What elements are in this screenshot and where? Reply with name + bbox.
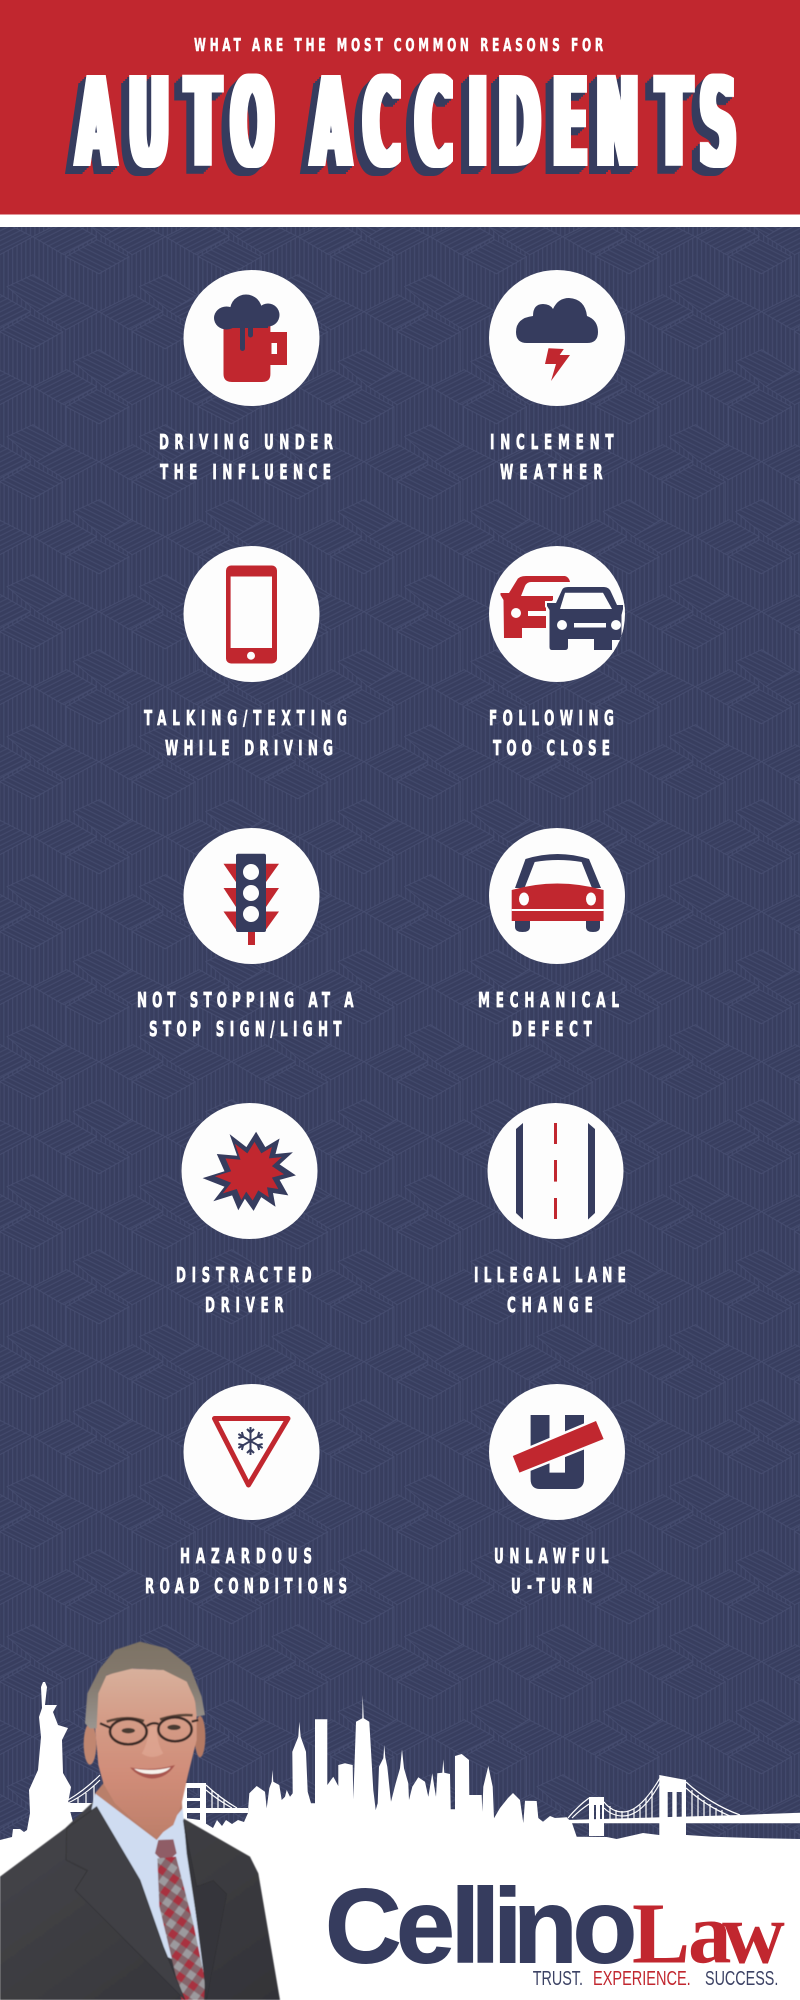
icon: car front [489,828,625,964]
logo: Cellino Law [325,1868,785,1990]
label: MECHANICAL [478,989,619,1012]
label: DRIVING UNDER [159,431,333,454]
logo wordmark: Cellino [325,1868,637,1986]
icon: traffic light [184,828,320,964]
item: hazardous road conditions [145,1384,347,1598]
item: following too close [489,546,625,760]
label: INCLEMENT [490,431,614,454]
label: ILLEGAL LANE [474,1264,626,1287]
right bridge deck, towers and cables [566,1775,800,1836]
title: AUTO ACCIDENTS [77,52,736,196]
icon: no u-turn [489,1384,625,1520]
left bridge deck and towers [68,1775,248,1828]
tagline [533,1968,778,1990]
label [144,707,347,760]
header band [0,0,800,214]
label: FOLLOWING [489,707,614,730]
item: talking/texting while driving [144,546,347,760]
patterned navy background [0,227,800,1400]
icon: beer mug [184,270,320,406]
item: inclement weather [489,270,625,484]
city skyline silhouette [0,1682,800,2000]
icon: explosion [182,1103,318,1239]
item: illegal lane change [474,1103,626,1317]
label: HAZARDOUS [180,1545,312,1568]
label [159,431,333,484]
label [494,1545,609,1598]
icon: storm cloud [489,270,625,406]
tagline: TRUST. [533,1968,583,1990]
icon: yield sign with snowflake [184,1384,320,1520]
item: distracted driver [176,1103,318,1317]
label: TOO CLOSE [493,737,610,760]
label [474,1264,626,1317]
patterned navy background lower [0,1400,800,2000]
logo red word: Law [632,1885,785,1982]
label: ROAD CONDITIONS [145,1575,347,1598]
label [137,989,354,1041]
label: UNLAWFUL [494,1545,609,1568]
label [478,989,619,1041]
label [489,707,614,760]
label: STOP SIGN/LIGHT [149,1018,342,1041]
label: NOT STOPPING AT A [137,989,354,1012]
label: TALKING/TEXTING [144,707,347,730]
icon: two cars [489,546,625,682]
item: mechanical defect [478,828,625,1041]
label: U-TURN [511,1575,593,1598]
icon: smartphone [184,546,320,682]
item: driving under the influence [159,270,333,484]
item: not stopping at a stop sign/light [137,828,354,1041]
label: DISTRACTED [176,1264,312,1287]
portrait of attorney [0,1642,280,2000]
label: DEFECT [512,1018,592,1041]
item: unlawful u-turn [489,1384,625,1598]
label: WEATHER [500,461,603,484]
label: CHANGE [507,1294,593,1317]
label: DRIVER [205,1294,284,1317]
subtitle: WHAT ARE THE MOST COMMON REASONS FOR [194,35,604,56]
label [176,1264,312,1317]
label [490,431,614,484]
label: THE INFLUENCE [160,461,331,484]
label [145,1545,347,1598]
label: WHILE DRIVING [165,737,333,760]
tagline: EXPERIENCE. [593,1968,691,1990]
icon: road lanes [488,1103,624,1239]
